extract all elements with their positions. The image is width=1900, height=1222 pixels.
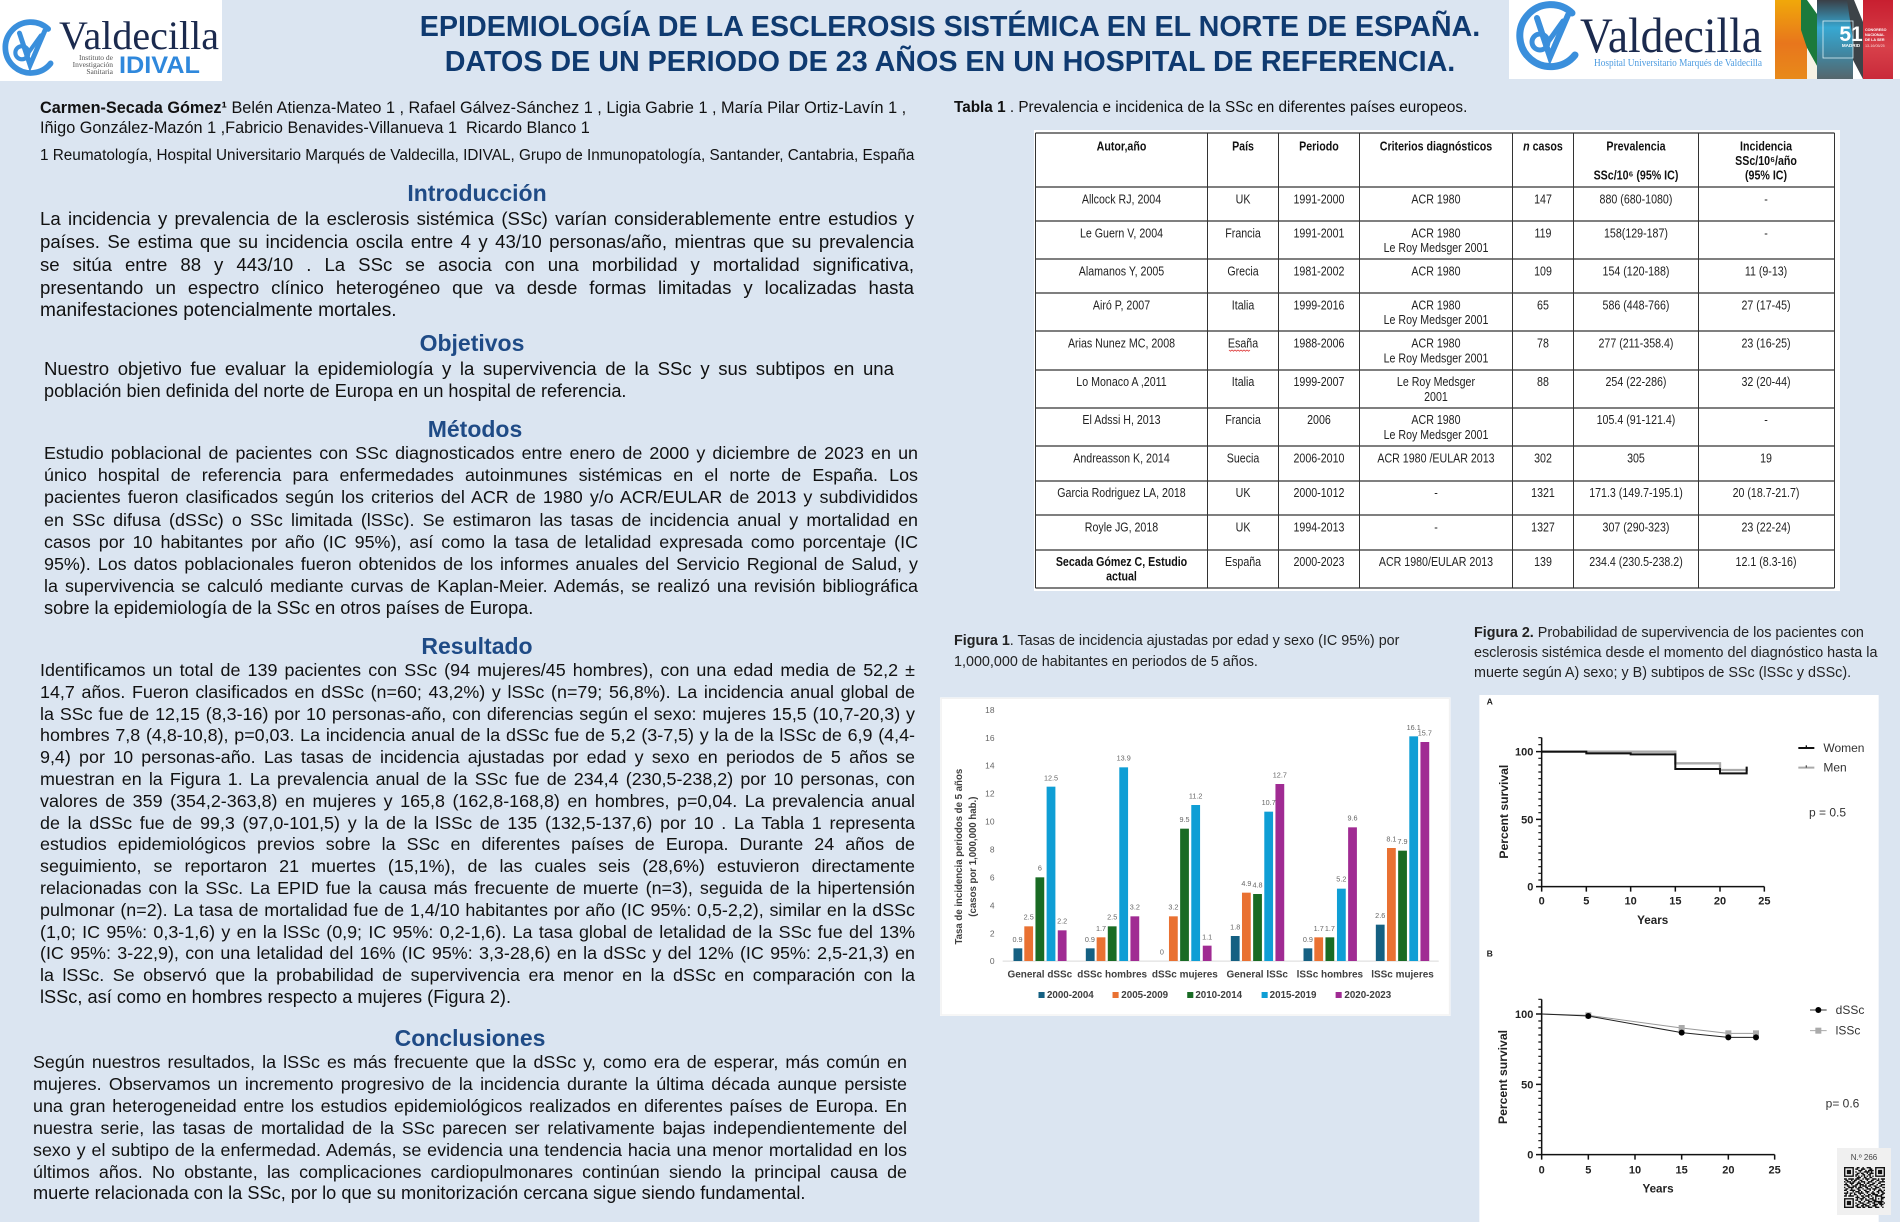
caption: figure 1: 1,000,000 de habitantes en periodos de 5 años. bbox=[954, 654, 1258, 670]
caption: figure 2: esclerosis sistémica desde el momento del diagnóstico hasta la bbox=[1474, 645, 1877, 661]
chart A: survival by sex: A bbox=[1487, 696, 1494, 706]
y axis ticks: 10 bbox=[985, 817, 995, 827]
authors bbox=[40, 99, 906, 137]
chart A: survival by sex: 0 bbox=[1539, 896, 1545, 908]
table row: El Adssi: Francia bbox=[1225, 412, 1261, 427]
table row: Lo Monaco: 88 bbox=[1537, 374, 1549, 389]
logo: Hospital Valdecilla and congress band: CONGRESO bbox=[1865, 28, 1887, 32]
table row: Allcock: 147 bbox=[1534, 191, 1552, 207]
text: results: muestran en la Figura 1. La prevalencia anual de la SSc fue de 234,4 (230,5-238,2) por 10 personas, con bbox=[40, 769, 915, 789]
table row: Arias Nunez: 78 bbox=[1537, 335, 1549, 351]
table row: Airó: Le Roy Medsger 2001 bbox=[1384, 312, 1489, 327]
table header: SSc/10⁶/año bbox=[1735, 153, 1797, 168]
chart B: survival by subtype: 25 bbox=[1769, 1164, 1781, 1176]
table row: current study bbox=[1056, 554, 1797, 584]
chart B: survival by subtype: 0 bbox=[1527, 1150, 1533, 1162]
text: results: hombres 7,8 (4,8-10,8), p=0,03. La incidencia anual de la dSSc fue de 5,2 (3-7,5) y la de la lSSc de 6,9 (4,4- bbox=[40, 725, 915, 745]
table row: Garcia Rodriguez: 20 (18.7-21.7) bbox=[1733, 485, 1800, 500]
text: introduction: se sitúa entre 88 y 443/10 . La SSc se asocia con una morbilidad y mortalidad significativa, bbox=[40, 254, 914, 275]
chart A: survival by sex: p = 0.5 bbox=[1809, 805, 1846, 819]
table row: El Adssi: ACR 1980 bbox=[1411, 412, 1461, 427]
table row: Garcia Rodriguez: UK bbox=[1236, 485, 1251, 500]
chart B: survival by subtype: lSSc bbox=[1836, 1024, 1860, 1038]
text: introduction: La incidencia y prevalencia de la esclerosis sistémica (SSc) varían considerablemente entre estudios y bbox=[40, 208, 914, 229]
table row: current study: 234.4 (230.5-238.2) bbox=[1589, 554, 1683, 569]
logo: IDIVAL: Instituto de bbox=[79, 53, 114, 62]
table row: Le Guern: Le Roy Medsger 2001 bbox=[1384, 240, 1489, 255]
chart B: survival by subtype: dSSc bbox=[1836, 1003, 1864, 1017]
y axis title: Tasa de incidencia periodos de 5 años bbox=[954, 769, 965, 945]
text: conclusions: nuestra serie, las tasas de mortalidad de la SSc parecen ser relativamente bajas independientemente del bbox=[33, 1118, 907, 1138]
text: methods: casos por 10 habitantes por año (IC 95%), así como la tasa de letalidad expresada como porcentaje (IC bbox=[44, 532, 918, 552]
y axis ticks: 0 bbox=[990, 956, 995, 966]
text: methods: sobre la epidemiología de la SSc en otros países de Europa. bbox=[44, 598, 533, 618]
table row: Royle: - bbox=[1434, 519, 1438, 535]
data labels: 0.9 bbox=[1013, 935, 1023, 944]
table row: Arias Nunez: Le Roy Medsger 2001 bbox=[1384, 350, 1489, 366]
text: introduction bbox=[40, 208, 914, 321]
table row: Royle: Royle JG, 2018 bbox=[1085, 519, 1159, 535]
data labels: 3.2 bbox=[1168, 903, 1178, 912]
table row: Royle bbox=[1085, 519, 1791, 535]
data labels: 9.5 bbox=[1179, 815, 1190, 824]
data labels: 0 bbox=[1160, 948, 1164, 957]
table row: current study: actual bbox=[1106, 568, 1137, 584]
table row: Andreasson: 302 bbox=[1534, 450, 1552, 466]
authors: Carmen-Secada Gómez¹ Belén Atienza-Mateo 1 , Rafael Gálvez-Sánchez 1 , Ligia Gabrie 1 , María Pilar Ortiz-Lavín 1 , bbox=[40, 99, 906, 117]
legend: 2005-2009 bbox=[1121, 990, 1169, 1001]
table row: Andreasson bbox=[1073, 450, 1772, 466]
text: conclusions: muerte relacionada con la SSc, por lo que su monitorización cercana sigue siendo fundamental. bbox=[33, 1183, 805, 1203]
table row: current study: 12.1 (8.3-16) bbox=[1736, 554, 1797, 569]
y axis ticks: 4 bbox=[990, 900, 995, 910]
table row: Arias Nunez: ACR 1980 bbox=[1411, 335, 1461, 351]
data labels: 15.7 bbox=[1418, 728, 1432, 737]
table header: Incidencia bbox=[1740, 138, 1792, 154]
logo: IDIVAL: Valdecilla bbox=[59, 13, 219, 58]
text: results: pulmonar (n=2). La tasa de mortalidad fue de 1,4/10 habitantes por año (IC 95%: 0,5-2,2), similar en la dSSc bbox=[40, 900, 915, 920]
text: conclusions: una gran heterogeneidad entre los estudios epidemiológicos realizados en diferentes países de Europa. En bbox=[33, 1096, 907, 1116]
table row: Alamanos bbox=[1079, 263, 1787, 279]
bars: dSSc mujeres bbox=[1169, 805, 1212, 961]
table row: Lo Monaco: 32 (20-44) bbox=[1741, 374, 1791, 389]
table row: Airó bbox=[1093, 297, 1791, 327]
chart A: survival by sex: 50 bbox=[1521, 814, 1533, 826]
text: methods: en SSc difusa (dSSc) o SSc limitada (lSSc). Se estimaron las tasas de incidencia anual y mortalidad en bbox=[44, 510, 918, 530]
chart A: survival by sex: 25 bbox=[1758, 896, 1770, 908]
table header: Autor,año bbox=[1097, 138, 1146, 154]
logo: Hospital Valdecilla and congress band: MADRID bbox=[1842, 43, 1861, 48]
chart B: survival by subtype: 20 bbox=[1722, 1164, 1734, 1176]
text: introduction: presentando un espectro clínico heterogéneo que va desde formas limitadas y localizadas hasta bbox=[40, 277, 914, 298]
caption: figure 2 bbox=[1474, 625, 1878, 681]
table row: Airó: Italia bbox=[1232, 297, 1255, 313]
category labels: lSSc hombres bbox=[1297, 970, 1364, 981]
chart A: survival by sex bbox=[1487, 696, 1864, 927]
text: results: la SSc fue de 12,15 (8,3-16) por 10 personas-año, con diferencias según el sexo: mujeres 15,5 (10,7-20,3) y bbox=[40, 704, 915, 724]
text: conclusions: mujeres. Observamos un incremento progresivo de la incidencia durante la última década aunque persiste bbox=[33, 1074, 907, 1094]
text: results: 9,4) por 10 personas-año. Las tasas de incidencia ajustadas por edad y sexo en periodos de 5 años se bbox=[40, 747, 915, 767]
legend: 2010-2014 bbox=[1195, 990, 1243, 1001]
table header: País bbox=[1232, 138, 1254, 154]
logo: Hospital Valdecilla and congress band: Valdecilla bbox=[1580, 7, 1762, 63]
data labels: 1.1 bbox=[1202, 932, 1212, 941]
panel: table 1 bbox=[1034, 130, 1840, 591]
text: objectives bbox=[44, 358, 894, 401]
chart A: survival by sex: Men bbox=[1823, 761, 1847, 775]
chart A: survival by sex: 5 bbox=[1583, 896, 1589, 908]
bars: General lSSc bbox=[1231, 784, 1284, 961]
table row: El Adssi: - bbox=[1764, 412, 1768, 427]
logo: Hospital Valdecilla and congress band bbox=[1509, 0, 1900, 79]
legend: 2020-2023 bbox=[1344, 990, 1392, 1001]
text: methods: Estudio poblacional de pacientes con SSc diagnosticados entre enero de 2000 y diciembre de 2023 en un bbox=[44, 443, 918, 463]
table row: Le Guern: Francia bbox=[1225, 225, 1261, 241]
data labels: 1.8 bbox=[1230, 923, 1240, 932]
chart A: survival by sex: 20 bbox=[1714, 896, 1726, 908]
chart B: survival by subtype: 0 bbox=[1539, 1164, 1545, 1176]
logo: IDIVAL: Investigación bbox=[73, 60, 113, 69]
text: objectives: Nuestro objetivo fue evaluar la epidemiología y la supervivencia de la SSc y sus subtipos en una bbox=[44, 358, 894, 379]
table row: Lo Monaco bbox=[1076, 374, 1791, 404]
data labels: 6 bbox=[1038, 864, 1042, 873]
table row: Allcock: Allcock RJ, 2004 bbox=[1082, 191, 1162, 207]
text: methods: pacientes fueron clasificados según los criterios del ACR de 1980 y/o ACR/EULAR de 2013 y subdivididos bbox=[44, 487, 918, 507]
logo: Hospital Valdecilla and congress band: 51 bbox=[1839, 23, 1863, 46]
bars: lSSc mujeres bbox=[1376, 736, 1429, 961]
table row: Allcock: - bbox=[1764, 191, 1768, 207]
table row: Alamanos: 1981-2002 bbox=[1294, 263, 1344, 279]
text: conclusions bbox=[33, 1052, 907, 1203]
authors: Iñigo González-Mazón 1 ,Fabricio Benavides-Villanueva 1 Ricardo Blanco 1 bbox=[40, 119, 590, 137]
data labels: 9.6 bbox=[1347, 814, 1358, 823]
caption: figure 2: Figura 2. Probabilidad de supervivencia de los pacientes con bbox=[1474, 625, 1864, 641]
table row: Garcia Rodriguez: 1321 bbox=[1531, 485, 1555, 500]
bars: General dSSc bbox=[1013, 787, 1067, 961]
table row: Allcock: ACR 1980 bbox=[1411, 191, 1461, 207]
table row: Arias Nunez: Esaña bbox=[1228, 335, 1258, 351]
table row: Garcia Rodriguez: - bbox=[1434, 485, 1438, 500]
chart A: survival by sex: Women bbox=[1823, 741, 1864, 755]
data labels: 1.7 bbox=[1314, 924, 1324, 933]
text: results: (1,0; IC 95%: 0,3-1,6) y en la lSSc (0,9; IC 95%: 0,2-1,6). La tasa global de letalidad de la SSc fue del 13% bbox=[40, 922, 915, 942]
table header: SSc/10⁶ (95% IC) bbox=[1594, 167, 1678, 183]
table row: Airó: 1999-2016 bbox=[1294, 297, 1345, 313]
data labels: 1.7 bbox=[1325, 924, 1335, 933]
data labels: 7.9 bbox=[1397, 837, 1408, 846]
y axis ticks: 8 bbox=[990, 844, 995, 854]
table row: Lo Monaco: 1999-2007 bbox=[1294, 374, 1344, 389]
chart B: survival by subtype: p= 0.6 bbox=[1826, 1096, 1860, 1110]
y axis ticks bbox=[985, 705, 995, 966]
text: results bbox=[40, 660, 915, 1007]
table row: El Adssi bbox=[1082, 412, 1768, 442]
text: results: la lSSc. Se observó que la probabilidad de supervivencia era menor en la dSSc en comparación con la bbox=[40, 965, 915, 985]
table row: Garcia Rodriguez bbox=[1057, 485, 1800, 500]
table row: Allcock: 1991-2000 bbox=[1294, 191, 1345, 207]
data labels: 1.7 bbox=[1096, 924, 1106, 933]
table header: Prevalencia bbox=[1606, 138, 1666, 154]
title: DATOS DE UN PERIODO DE 23 AÑOS EN UN HOSPITAL DE REFERENCIA. bbox=[445, 46, 1455, 78]
chart B: survival by subtype: 15 bbox=[1676, 1164, 1688, 1176]
table row: Alamanos: 11 (9-13) bbox=[1745, 263, 1787, 279]
text: results: de la dSSc fue de 99,3 (97,0-101,5) y la de la lSSc de 135 (132,5-137,6) por 10 . La Tabla 1 representa bbox=[40, 813, 915, 833]
QR code box: N.º 266 bbox=[1851, 1153, 1877, 1162]
text: methods: la supervivencia se calculó mediante curvas de Kaplan-Meier. Además, se realizó una revisión bibliográfica bbox=[44, 576, 918, 596]
data labels: 12.5 bbox=[1044, 773, 1058, 782]
data labels: 3.2 bbox=[1130, 903, 1140, 912]
data labels: 2.6 bbox=[1375, 911, 1385, 920]
data labels: 13.9 bbox=[1117, 753, 1131, 762]
heading: Introducción: Introducción bbox=[407, 180, 547, 206]
title: EPIDEMIOLOGÍA DE LA ESCLEROSIS SISTÉMICA EN EL NORTE DE ESPAÑA. bbox=[420, 11, 1480, 43]
table row: current study: 2000-2023 bbox=[1294, 554, 1345, 569]
bars: lSSc hombres bbox=[1304, 827, 1357, 961]
category labels bbox=[1007, 970, 1434, 981]
text: introduction: manifestaciones potencialmente mortales. bbox=[40, 300, 397, 321]
text: results: valores de 359 (354,2-363,8) en mujeres y 165,8 (162,8-168,8) en hombres, p=0,04. La prevalencia anual bbox=[40, 791, 915, 811]
category labels: dSSc mujeres bbox=[1152, 970, 1218, 981]
table row: Lo Monaco: Le Roy Medsger bbox=[1397, 374, 1475, 389]
table row: El Adssi: 2006 bbox=[1307, 412, 1331, 427]
y axis ticks: 14 bbox=[985, 761, 995, 771]
table row: Alamanos: ACR 1980 bbox=[1411, 263, 1461, 279]
table row: Le Guern: 119 bbox=[1535, 225, 1552, 241]
table row: Le Guern: ACR 1980 bbox=[1411, 225, 1461, 241]
table row: El Adssi: Le Roy Medsger 2001 bbox=[1384, 427, 1489, 442]
chart B: survival by subtype: 5 bbox=[1585, 1164, 1591, 1176]
text: results: Identificamos un total de 139 pacientes con SSc (94 mujeres/45 hombres), con una edad media de 52,2 ± bbox=[40, 660, 915, 680]
table row: Airó: Airó P, 2007 bbox=[1093, 297, 1150, 313]
data labels: 0.9 bbox=[1303, 935, 1313, 944]
logo: Hospital Valdecilla and congress band: 13-16/05/25 bbox=[1865, 44, 1885, 48]
text: conclusions: sexo y el subtipo de la enfermedad. Además, se evidencia una tendencia hacia una menor mortalidad en los bbox=[33, 1140, 907, 1160]
table row: Andreasson: 305 bbox=[1627, 450, 1645, 466]
chart A: survival by sex: 10 bbox=[1625, 896, 1637, 908]
y axis ticks: 12 bbox=[985, 789, 995, 799]
text: conclusions: últimos años. No obstante, las complicaciones cardiopulmonares continúan siendo la principal causa de bbox=[33, 1162, 907, 1182]
legend: 2000-2004 bbox=[1047, 990, 1094, 1001]
caption: table 1: Tabla 1 . Prevalencia e incidenica de la SSc en diferentes países europeos. bbox=[954, 99, 1467, 116]
y axis title: (casos por 1,000,000 hab.) bbox=[968, 797, 979, 917]
text: results: (IC 95%: 3-22,9), con una letalidad del 16% (IC 95%: 3,3-28,6) en la dSSc y del 12% (IC 95%: 2,5-21,3) en bbox=[40, 943, 915, 963]
category labels: lSSc mujeres bbox=[1371, 970, 1434, 981]
table row: Le Guern: 158(129-187) bbox=[1604, 225, 1668, 241]
table row: Alamanos: Grecia bbox=[1227, 263, 1259, 279]
text: results: relacionadas con la SSc. La EPID fue la causa más frecuente de muerte (n=3), seguida de la hipertensión bbox=[40, 878, 915, 898]
table row: Allcock: UK bbox=[1236, 191, 1251, 207]
table header: (95% IC) bbox=[1745, 167, 1787, 183]
table row: Royle: 1994-2013 bbox=[1294, 519, 1345, 535]
table row: Arias Nunez: Arias Nunez MC, 2008 bbox=[1068, 335, 1175, 351]
table row: Alamanos: Alamanos Y, 2005 bbox=[1079, 263, 1165, 279]
table row: Andreasson: ACR 1980 /EULAR 2013 bbox=[1377, 450, 1495, 466]
table row: El Adssi: El Adssi H, 2013 bbox=[1082, 412, 1161, 427]
table row: Royle: 1327 bbox=[1531, 519, 1555, 535]
table row: Allcock bbox=[1082, 191, 1768, 207]
table row: Le Guern: - bbox=[1764, 225, 1768, 241]
affiliation: 1 Reumatología, Hospital Universitario Marqués de Valdecilla, IDIVAL, Grupo de Inmunopatología, Santander, Cantabria, España bbox=[40, 147, 914, 164]
chart B: survival by subtype: B bbox=[1487, 949, 1493, 959]
category labels: General lSSc bbox=[1226, 970, 1288, 981]
table row: Andreasson: 2006-2010 bbox=[1294, 450, 1345, 466]
data labels: 16.1 bbox=[1407, 723, 1421, 732]
text: methods bbox=[44, 443, 918, 618]
bars: dSSc hombres bbox=[1086, 767, 1139, 961]
text: introduction: países. Se estima que su incidencia oscila entre 4 y 43/10 personas/año, mientras que su prevalencia bbox=[40, 231, 914, 252]
table row: current study: ACR 1980/EULAR 2013 bbox=[1379, 554, 1493, 569]
text: objectives: población bien definida del norte de Europa en un hospital de referencia. bbox=[44, 381, 626, 401]
table header: n casos bbox=[1523, 138, 1563, 154]
table row: Le Guern: 1991-2001 bbox=[1294, 225, 1345, 241]
title bbox=[420, 10, 1480, 78]
data labels: 4.9 bbox=[1241, 879, 1251, 888]
chart B: survival by subtype: 50 bbox=[1521, 1079, 1533, 1091]
table header: Criterios diagnósticos bbox=[1380, 138, 1493, 154]
chart B: survival by subtype: 100 bbox=[1515, 1009, 1533, 1021]
chart A: survival by sex: 100 bbox=[1515, 747, 1533, 759]
table row: Alamanos: 154 (120-188) bbox=[1603, 263, 1669, 279]
y axis ticks: 16 bbox=[985, 733, 995, 743]
y axis ticks: 2 bbox=[990, 928, 995, 938]
chart A: survival by sex: 0 bbox=[1527, 882, 1533, 894]
table row: Arias Nunez bbox=[1068, 335, 1791, 366]
table row: Arias Nunez: 277 (211-358.4) bbox=[1598, 335, 1674, 351]
table row: Alamanos: 109 bbox=[1534, 263, 1552, 279]
chart A: survival by sex: Percent survival bbox=[1497, 765, 1511, 859]
table row: Airó: ACR 1980 bbox=[1411, 297, 1461, 313]
table row: Arias Nunez: 23 (16-25) bbox=[1741, 335, 1791, 351]
panel: figure 2 survival charts bbox=[1479, 695, 1879, 1222]
table row: Royle: 23 (22-24) bbox=[1741, 519, 1791, 535]
table row: Andreasson: Suecia bbox=[1227, 450, 1260, 466]
data labels: 2.5 bbox=[1107, 912, 1117, 921]
table row: Airó: 27 (17-45) bbox=[1741, 297, 1791, 313]
heading: Conclusiones: Conclusiones bbox=[395, 1025, 545, 1051]
logo: Hospital Valdecilla and congress band: Hospital Universitario Marqués de Valdecilla bbox=[1594, 57, 1762, 69]
caption: figure 1: Figura 1. Tasas de incidencia ajustadas por edad y sexo (IC 95%) por bbox=[954, 633, 1399, 649]
y axis title bbox=[954, 769, 979, 945]
chart B: survival by subtype: 10 bbox=[1629, 1164, 1641, 1176]
table row: Airó: 65 bbox=[1537, 297, 1549, 313]
table row: current study: Secada Gómez C, Estudio bbox=[1056, 554, 1187, 569]
table row: Andreasson: 19 bbox=[1760, 450, 1772, 466]
data labels: 4.8 bbox=[1252, 880, 1263, 889]
data labels: 10.7 bbox=[1262, 798, 1276, 807]
table header bbox=[1097, 138, 1797, 183]
table row: Le Guern bbox=[1080, 225, 1768, 255]
chart B: survival by subtype: Percent survival bbox=[1496, 1030, 1510, 1124]
table row: Lo Monaco: Italia bbox=[1232, 374, 1255, 389]
table row: Allcock: 880 (680-1080) bbox=[1600, 191, 1672, 207]
panel: figure 1 bar chart bbox=[940, 697, 1450, 1016]
table row: Royle: UK bbox=[1236, 519, 1251, 535]
logo: IDIVAL: Sanitaria bbox=[86, 67, 114, 76]
logo: IDIVAL: IDIVAL bbox=[119, 52, 200, 79]
logo: Hospital Valdecilla and congress band: NACIONAL bbox=[1865, 33, 1885, 37]
chart B: survival by subtype: Years bbox=[1642, 1183, 1674, 1196]
data labels: 5.2 bbox=[1336, 875, 1346, 884]
chart A: survival by sex: Years bbox=[1637, 914, 1668, 927]
category labels: General dSSc bbox=[1007, 970, 1073, 981]
table row: Garcia Rodriguez: 171.3 (149.7-195.1) bbox=[1589, 485, 1683, 500]
caption: figure 1 bbox=[954, 633, 1400, 670]
table row: Lo Monaco: Lo Monaco A ,2011 bbox=[1076, 374, 1167, 389]
table row: Lo Monaco: 254 (22-286) bbox=[1605, 374, 1667, 389]
caption: figure 2: muerte según A) sexo; y B) subtipos de SSc (lSSc y dSSc). bbox=[1474, 665, 1851, 681]
table row: Arias Nunez: 1988-2006 bbox=[1294, 335, 1345, 351]
data labels: 11.2 bbox=[1189, 791, 1202, 800]
heading: Objetivos: Objetivos bbox=[420, 330, 524, 356]
text: results: seguimiento, se reportaron 21 muertes (15,1%), de las cuales seis (28,6%) estuvieron directamente bbox=[40, 856, 915, 876]
text: results: estudios epidemiológicos previos sobre la SSc en diferentes países de Europa. Durante 24 años de bbox=[40, 834, 915, 854]
table row: Royle: 307 (290-323) bbox=[1603, 519, 1669, 535]
data labels: 2.5 bbox=[1024, 912, 1034, 921]
table row: Le Guern: Le Guern V, 2004 bbox=[1080, 225, 1163, 241]
chart A: survival by sex: 15 bbox=[1669, 896, 1681, 908]
data labels: 12.7 bbox=[1273, 771, 1287, 780]
category labels: dSSc hombres bbox=[1077, 970, 1148, 981]
chart B: survival by subtype bbox=[1487, 949, 1864, 1196]
logo: IDIVAL bbox=[0, 0, 222, 81]
y axis ticks: 18 bbox=[985, 705, 995, 715]
table row: Garcia Rodriguez: 2000-1012 bbox=[1294, 485, 1344, 500]
data labels: 8.1 bbox=[1386, 834, 1396, 843]
text: methods: único hospital de referencia para enfermedades autoinmunes sistémicas en el norte de España. Los bbox=[44, 465, 918, 485]
logo: Hospital Valdecilla and congress band: DE LA SER bbox=[1865, 38, 1885, 42]
table row: current study: 139 bbox=[1534, 554, 1552, 569]
heading: Métodos: Métodos bbox=[428, 416, 522, 442]
table row: Lo Monaco: 2001 bbox=[1424, 389, 1448, 404]
legend bbox=[1039, 990, 1392, 1001]
data labels bbox=[1013, 723, 1432, 957]
text: results: 14,7 años. Fueron clasificados en dSSc (n=60; 43,2%) y lSSc (n=79; 56,8%). La incidencia anual global de bbox=[40, 682, 915, 702]
table row: El Adssi: 105.4 (91-121.4) bbox=[1597, 412, 1675, 427]
table header: Periodo bbox=[1299, 138, 1339, 154]
QR code box bbox=[1837, 1148, 1891, 1215]
heading: Resultado: Resultado bbox=[421, 633, 533, 659]
table row: Andreasson: Andreasson K, 2014 bbox=[1073, 450, 1170, 466]
table row: Garcia Rodriguez: Garcia Rodriguez LA, 2018 bbox=[1057, 485, 1186, 500]
text: conclusions: Según nuestros resultados, la lSSc es más frecuente que la dSSc y, como era de esperar, más común en bbox=[33, 1052, 907, 1072]
text: methods: 95%). Los datos poblacionales fueron obtenidos de los informes anuales del Servicio Regional de Salud, y bbox=[44, 554, 918, 574]
text: results: lSSc, así como en hombres respecto a mujeres (Figura 2). bbox=[40, 987, 511, 1007]
table row: Airó: 586 (448-766) bbox=[1603, 297, 1669, 313]
table row: current study: España bbox=[1225, 554, 1261, 569]
data labels: 2.2 bbox=[1057, 917, 1067, 926]
y axis ticks: 6 bbox=[990, 872, 995, 882]
legend: 2015-2019 bbox=[1270, 990, 1317, 1001]
data labels: 0.9 bbox=[1085, 935, 1095, 944]
